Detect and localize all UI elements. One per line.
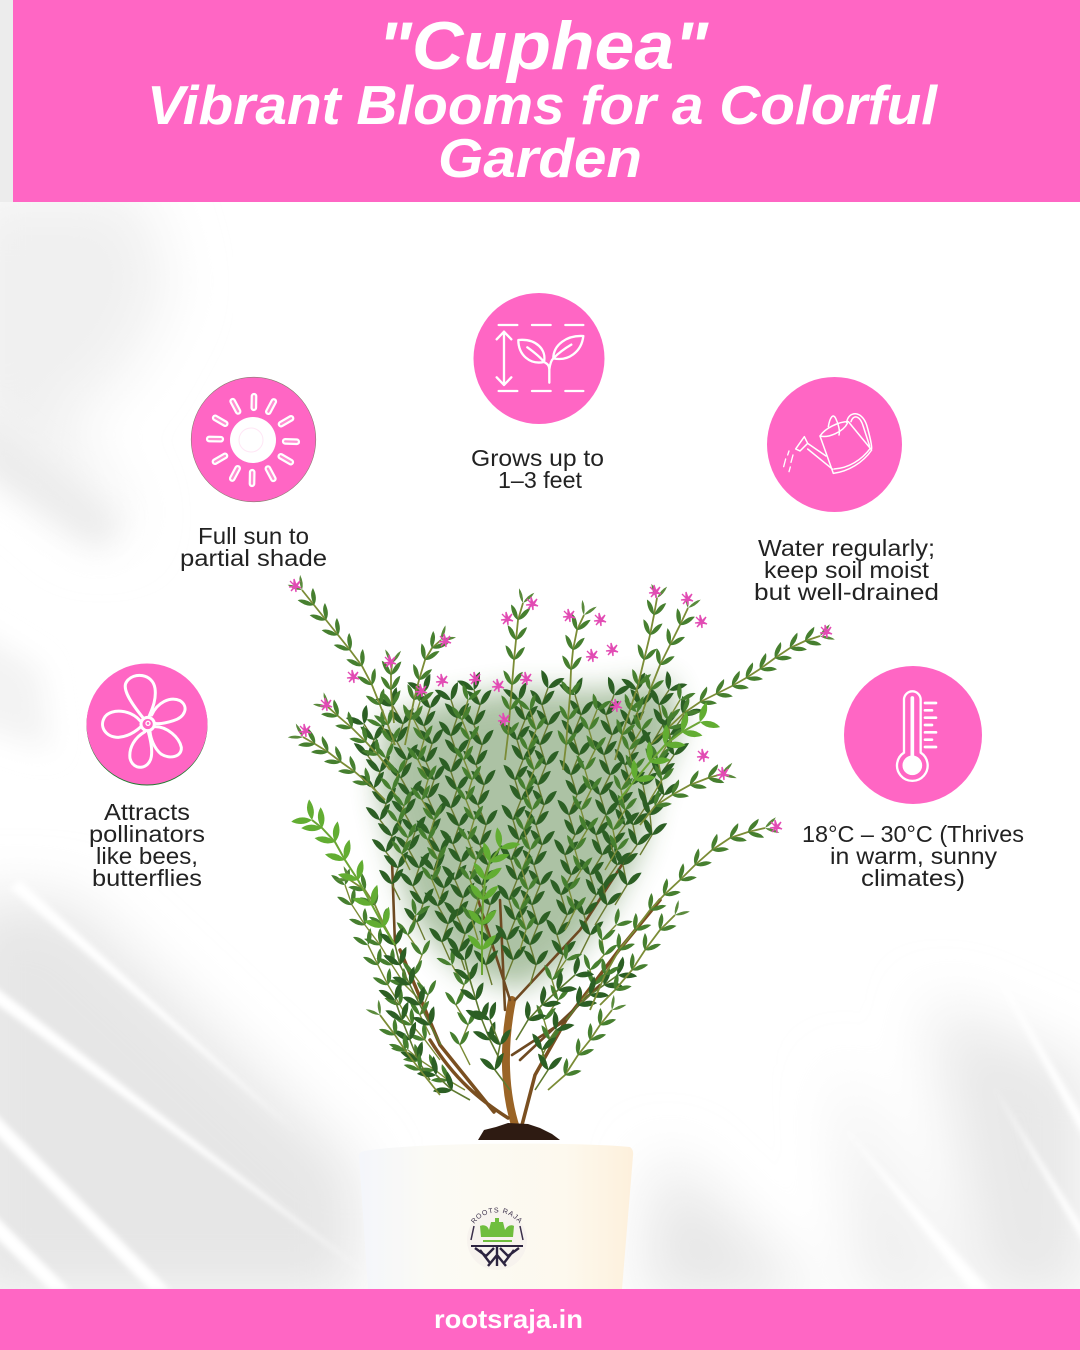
label: water: keep soil moist bbox=[764, 557, 930, 583]
blossoms bbox=[289, 579, 832, 833]
feature: water bbox=[754, 377, 939, 605]
label: height: 1–3 feet bbox=[498, 467, 583, 493]
lower dark stems bbox=[395, 945, 618, 1100]
label: pollinators: Attracts bbox=[104, 799, 190, 825]
title line: Vibrant Blooms for a Colorful: Vibrant Blooms for a Colorful bbox=[147, 74, 939, 136]
label: height: Grows up to bbox=[471, 445, 604, 471]
icon: thermometer bbox=[844, 666, 982, 804]
website address: rootsraja.in bbox=[434, 1304, 583, 1334]
header band bbox=[0, 0, 1080, 202]
icon: flower bbox=[86, 664, 208, 786]
label: temperature: in warm, sunny bbox=[830, 843, 998, 869]
plant: cuphea shrub bbox=[289, 579, 832, 1140]
title line: Garden: Garden bbox=[438, 127, 642, 189]
label: pollinators: like bees, bbox=[96, 843, 198, 869]
title line: Cuphea: "Cuphea" bbox=[378, 8, 709, 84]
footer band bbox=[0, 1289, 1080, 1350]
icon: plant height bbox=[474, 293, 604, 424]
trunk and woody branches bbox=[392, 860, 660, 1128]
label: water: but well-drained bbox=[754, 579, 939, 605]
icon: sun bbox=[191, 377, 316, 502]
dense dark stems with leaf pairs bbox=[364, 688, 684, 985]
label: temperature: 18°C – 30°C (Thrives bbox=[802, 821, 1024, 847]
label: sun: partial shade bbox=[180, 545, 327, 571]
feature: sun bbox=[180, 377, 327, 571]
label: temperature bbox=[802, 821, 1024, 891]
label: sun bbox=[180, 523, 327, 571]
label: height bbox=[471, 445, 604, 493]
soil bbox=[478, 1123, 560, 1140]
feature: pollinators bbox=[86, 664, 208, 891]
logo sticker bbox=[470, 1208, 524, 1267]
medium green stems with leaf pairs bbox=[345, 700, 680, 1090]
label: temperature: climates) bbox=[861, 865, 965, 891]
label: water bbox=[754, 535, 939, 605]
icon: watering can bbox=[767, 377, 902, 512]
label: pollinators: pollinators bbox=[89, 821, 205, 847]
label: pollinators: butterflies bbox=[92, 865, 202, 891]
feature: temperature bbox=[802, 666, 1024, 891]
soft foliage shadow bbox=[378, 680, 680, 990]
outer branches with narrow leaves bbox=[302, 590, 820, 1095]
label: water: Water regularly; bbox=[758, 535, 935, 561]
feature: height bbox=[471, 293, 604, 493]
bright young shoots bbox=[312, 722, 700, 975]
label: sun: Full sun to bbox=[198, 523, 309, 549]
logo sticker: ROOTS RAJA bbox=[470, 1208, 522, 1224]
white pot with logo bbox=[405, 1144, 634, 1289]
label: pollinators bbox=[89, 799, 205, 891]
